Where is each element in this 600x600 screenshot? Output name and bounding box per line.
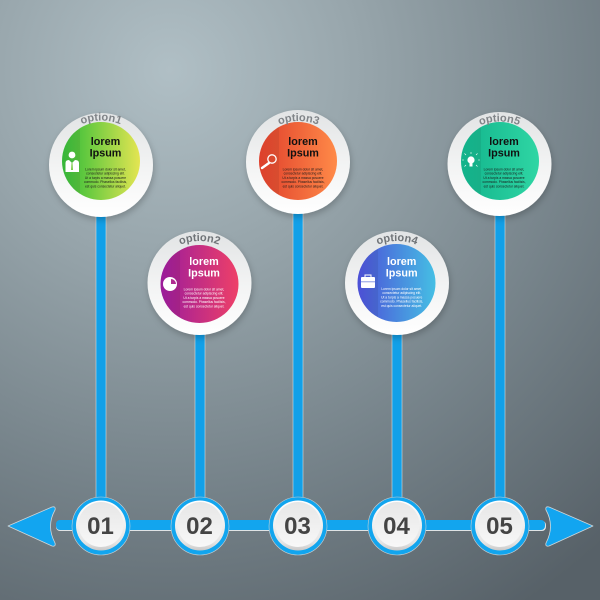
body text — [380, 287, 423, 308]
option 3 — [244, 110, 354, 220]
body text: Ut a turpis a massa posuere — [183, 296, 225, 300]
node 02 — [171, 497, 229, 555]
arrow: right — [546, 507, 593, 546]
body text: Ut a turpis a massa posuere — [282, 176, 324, 180]
option 4: Ipsum — [386, 268, 418, 280]
body text: consectetur adipiscing elit. — [86, 172, 125, 176]
option 5: Ipsum — [488, 148, 520, 160]
option 3: Ipsum — [287, 148, 319, 160]
body text — [281, 168, 325, 188]
icon: person — [66, 152, 79, 172]
body text — [482, 168, 526, 188]
body text: est quis consectetur aliquet. — [283, 184, 324, 188]
timeline axis — [56, 520, 546, 531]
body text: consectetur adipiscing elit. — [485, 172, 523, 176]
body text: Lorem ipsum dolor sit amet, — [85, 168, 126, 172]
body text: consectetur adipiscing elit. — [284, 172, 322, 176]
node 03: 03 — [284, 513, 311, 540]
node 04: 04 — [383, 513, 410, 540]
body text: consectetur adipiscing elit. — [185, 292, 223, 296]
node 01 — [72, 497, 130, 555]
body text: commodo. Phasellus facilisis, — [482, 180, 526, 184]
body text: Ut a turpis a massa posuere — [85, 176, 126, 180]
option 2 label: option2 — [179, 233, 220, 245]
node 05 — [471, 497, 529, 555]
heading: lorem — [288, 136, 318, 148]
icon: briefcase — [361, 275, 375, 288]
option 1 label: option1 — [80, 112, 121, 124]
node 02: 02 — [186, 513, 213, 540]
body text: est quis consectetur aliquet. — [184, 304, 225, 308]
body text: Lorem ipsum dolor sit amet, — [184, 288, 224, 292]
heading: lorem — [189, 256, 219, 268]
body text: Ut a turpis a massa posuere — [381, 295, 422, 299]
body text: commodo. Phasellus facilisis, — [281, 180, 325, 184]
body text: Lorem ipsum dolor sit amet, — [381, 287, 422, 291]
node 05: 05 — [486, 513, 513, 540]
heading: lorem — [489, 136, 519, 148]
body text — [84, 168, 127, 188]
body text: commodo. Phasellus facilisis, — [182, 300, 226, 304]
option 5 label: option5 — [479, 114, 521, 126]
body text — [182, 288, 226, 308]
body text: est quis consectetur aliquet. — [381, 304, 422, 308]
option 4 — [344, 231, 452, 341]
heading: lorem — [91, 136, 120, 148]
option 2 — [146, 231, 254, 341]
node 01: 01 — [87, 513, 114, 540]
option 1 — [48, 112, 156, 223]
option 1: Ipsum — [90, 148, 121, 160]
body text: est quis consectetur aliquet. — [484, 184, 525, 188]
body text: Lorem ipsum dolor sit amet, — [484, 168, 524, 172]
option 4 label: option4 — [376, 233, 418, 245]
icon: light bulb — [462, 152, 480, 166]
icon: pie chart — [163, 277, 177, 291]
stems — [96, 205, 505, 505]
option 3 label: option3 — [278, 113, 320, 125]
option 5 — [446, 112, 554, 222]
icon: magnifier — [262, 155, 276, 168]
body text: commodo. Phasellus facilisis, — [84, 180, 127, 184]
body text: Ut a turpis a massa posuere — [483, 176, 525, 180]
heading: lorem — [387, 256, 416, 268]
body text: commodo. Phasellus facilisis, — [380, 300, 423, 304]
body text: consectetur adipiscing elit. — [382, 291, 421, 295]
node 03 — [269, 497, 327, 555]
node 04 — [368, 497, 426, 555]
option 2: Ipsum — [188, 268, 220, 280]
body text: est quis consectetur aliquet. — [85, 184, 126, 188]
body text: Lorem ipsum dolor sit amet, — [283, 168, 323, 172]
arrow: left — [8, 507, 55, 546]
